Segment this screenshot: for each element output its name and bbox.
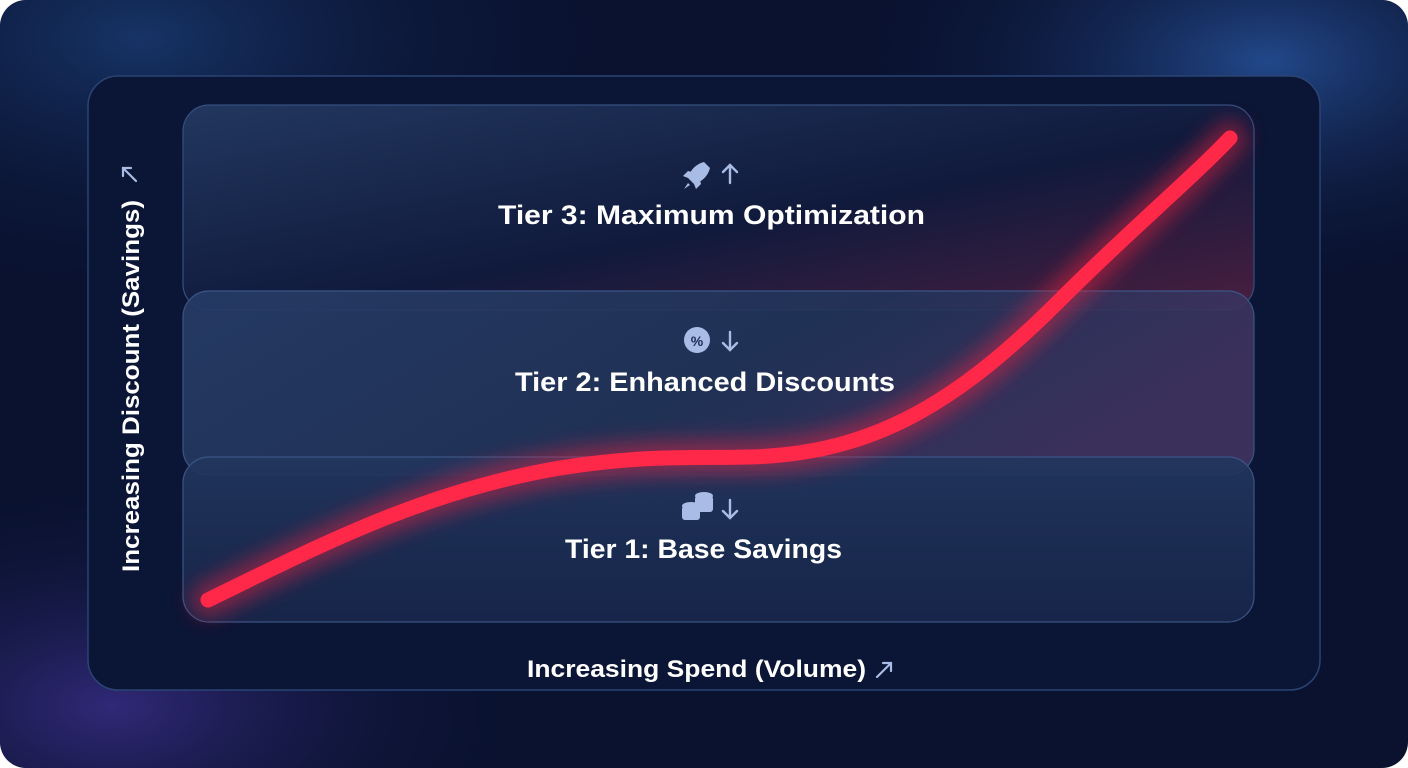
band: tier 3 bbox=[183, 105, 1254, 310]
tier 3 label bbox=[498, 162, 925, 230]
icon: down arrow bbox=[723, 332, 737, 350]
tier 3 label: Tier 3: Maximum Optimization bbox=[498, 200, 925, 230]
band: tier 1 bbox=[183, 457, 1254, 622]
icon: percent badge bbox=[684, 327, 710, 353]
icon: rocket bbox=[683, 162, 710, 189]
icon: arrow up-right bbox=[877, 663, 891, 677]
icon: down arrow bbox=[723, 500, 737, 518]
tier 1 label bbox=[565, 492, 842, 564]
curve: discount growth bbox=[208, 138, 1230, 600]
icon: percent badge: % bbox=[691, 333, 704, 349]
band: tier 2 bbox=[183, 291, 1254, 475]
icon: coins bbox=[682, 492, 713, 520]
icon: arrow up-left bbox=[123, 168, 136, 181]
tier 2 label: Tier 2: Enhanced Discounts bbox=[515, 367, 895, 397]
icon: up arrow bbox=[723, 165, 737, 183]
chart frame bbox=[88, 76, 1320, 690]
tier 1 label: Tier 1: Base Savings bbox=[565, 534, 842, 564]
y-axis label: Increasing Discount (Savings) bbox=[118, 200, 145, 572]
x-axis label: Increasing Spend (Volume) bbox=[527, 656, 866, 683]
tier 2 label bbox=[515, 327, 895, 397]
